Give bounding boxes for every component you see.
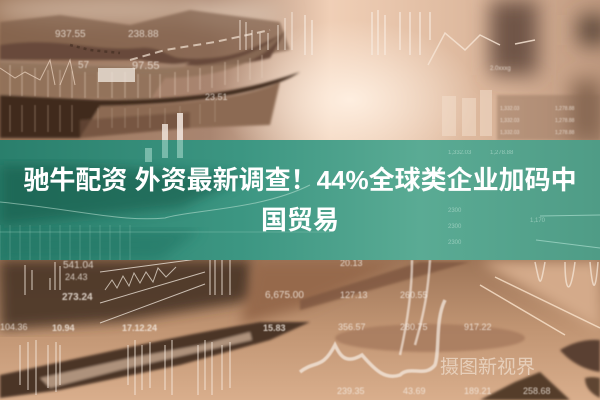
photo: upper half tones (0, 0, 600, 180)
band: faint data table, right: 1,332.03 (448, 150, 472, 156)
photo: blurred market figures, lower: 17.12.24 (122, 323, 157, 333)
photo: blurred market figures, lower: 43.69 (403, 386, 426, 396)
teal title band (0, 140, 600, 260)
photo: blurred market figures, upper: 57 (78, 60, 90, 71)
photo: curved dark market board, upper left (0, 10, 300, 138)
photo: blurred market figures, lower: 104.36 (0, 322, 28, 332)
photo: blurred market figures, upper: 2.0xxxg (490, 66, 511, 72)
photo: blurred market figures, lower: 239.35 (337, 386, 365, 396)
title: 驰牛配资 外资最新调查！44%全球类企业加码中国贸易 (23, 165, 577, 235)
photo: blurred market figures, lower: 258.68 (523, 386, 551, 396)
photo: blurred market figures, lower: 541.04 (63, 260, 94, 271)
photo: blurred market figures, upper: 97.55 (132, 60, 160, 72)
photo: pale tick-bar clusters (20, 10, 430, 395)
band: trend lines, right (536, 215, 600, 248)
photo: blurred market figures, upper (55, 29, 575, 136)
photo: blurred market figures, lower: 917.22 (464, 322, 492, 332)
band: faint data table, right: 1,170 (530, 218, 546, 224)
photo: blurred market figures, upper: 1,332.03 (500, 118, 520, 124)
band: faint data table, right (448, 150, 546, 246)
photo: blurred market figures, lower: 24.43 (65, 272, 88, 282)
photo: upper-left grid bars (10, 55, 262, 132)
band: faint data table, right: 2300 (448, 240, 462, 246)
photo: blurred market figures, lower: 356.57 (338, 322, 366, 332)
photo: blurred market figures, upper: 1,332.03 (500, 130, 520, 136)
photo: blurred market figures, upper: 23.51 (205, 92, 228, 102)
photo: blurred market figures, upper: 238.88 (128, 29, 159, 40)
photo: blurred market figures, lower: 6,675.00 (265, 290, 304, 301)
band: pale bars continuing through the band (145, 140, 183, 162)
photo: blurred market figures, upper: 1,278.88 (555, 106, 575, 112)
photo: pale bars, upper centre (98, 68, 492, 158)
photo: dark table block, upper right (497, 95, 600, 140)
photo: blurred market figures, lower: 273.24 (62, 292, 93, 303)
photo: blurred market figures, lower: 280.75 (400, 322, 428, 332)
band: dark chart texture showing through on the left (0, 165, 330, 260)
photo: blurred market figures, lower: 15.83 (263, 323, 286, 333)
photo: blurred market figures, lower: 127.13 (340, 290, 368, 300)
photo: watermark: 摄图新视界 (440, 356, 535, 378)
photo: blurred market figures, upper: 1,332.03 (500, 106, 520, 112)
photo: banknote strip across the bottom left (0, 322, 600, 400)
photo: blurred market figures, upper: 937.55 (55, 29, 86, 40)
photo: blurred market figures, lower: 189.21 (464, 386, 492, 396)
photo: blurred market figures, lower (0, 258, 551, 396)
photo: blurred market figures, upper: 1,278.88 (555, 130, 575, 136)
photo: blurred market figures, lower: 10.94 (52, 323, 75, 333)
band: faint data table, right: 2300 (448, 208, 462, 214)
band: faint data table, right: 1,278.88 (490, 150, 514, 156)
photo: blurred market figures, lower: 260.55 (400, 290, 428, 300)
photo: blurred market figures, upper: 1,278.88 (555, 118, 575, 124)
photo: lower half tones (0, 255, 600, 400)
band: faint data table, right: 2300 (448, 224, 462, 230)
photo: blurred market figures, lower: 20.13 (340, 258, 363, 268)
